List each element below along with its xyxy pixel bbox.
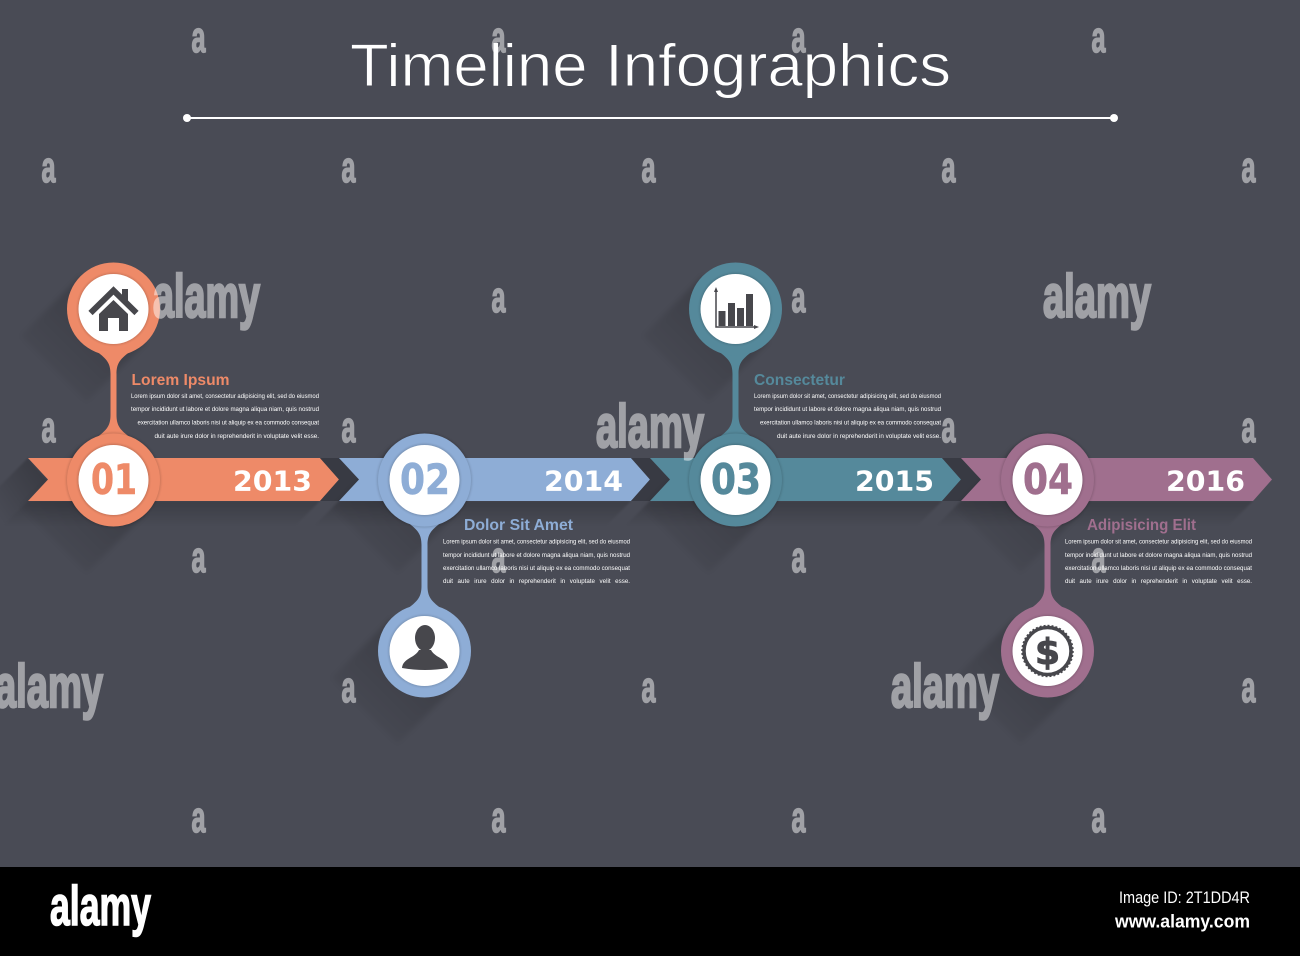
watermarks: a [1092,13,1106,62]
icon circle: person [378,604,471,698]
body text 4: exercitation ullamco laboris nisi ut aliquip ex ea commodo consequat [1065,565,1252,572]
watermarks: a [492,273,506,322]
watermarks: a [192,533,206,582]
watermarks: a [42,403,56,452]
body text 1: duit aute irure dolor in reprehenderit in voluptate velit esse. [154,433,319,440]
body text 3: exercitation ullamco laboris nisi ut aliquip ex ea commodo consequat [760,420,941,426]
body text 2: Lorem ipsum dolor sit amet, consectetur adipisicing elit, sed do eiusmod [443,538,631,546]
watermarks: a [1242,403,1256,452]
watermarks: alamy [1043,263,1151,330]
icon circle: dollar coin: $ [1035,632,1060,673]
body text 4 [1065,538,1253,585]
year 2014: 2014 [544,464,623,498]
number circle 01 [66,432,161,528]
step 4: 2016 [935,432,1272,744]
number circle 01: 01 [91,455,137,504]
ribbon 4 [961,458,1272,501]
icon circle: dollar coin [1001,604,1094,698]
watermarks: a [642,663,656,712]
watermarks: a [342,663,356,712]
body text 2: duit aute irure dolor in reprehenderit in voluptate velit esse. [443,578,630,585]
watermarks: a [1092,793,1106,842]
year 2015: 2015 [855,464,934,498]
title divider line [183,114,1118,122]
watermarks: a [1242,143,1256,192]
number circle 04: 04 [1023,455,1073,504]
heading: Adipisicing Elit: Adipisicing Elit [1087,517,1196,534]
icon circle: house [67,262,160,356]
heading: Consectetur: Consectetur [754,372,845,389]
ribbon 2 [339,458,650,501]
year 2013: 2013 [233,464,312,498]
watermarks: alamy [891,653,999,720]
watermarks: a [792,793,806,842]
body text 3: Lorem ipsum dolor sit amet, consectetur adipisicing elit, sed do eiusmod [754,393,942,400]
watermarks: a [492,533,506,582]
number circle 03 [688,432,783,528]
watermarks: alamy [0,653,103,720]
number circle 02 [377,432,472,528]
body text 3 [754,393,942,440]
body text 4: tempor incididunt ut labore et dolore magna aliqua niam, quis nostrud [1065,552,1253,559]
watermarks: a [642,143,656,192]
ribbon 1 [28,458,339,501]
watermarks: a [792,273,806,322]
watermarks: a [492,793,506,842]
body text 3: duit aute irure dolor in reprehenderit in voluptate velit esse. [777,433,941,440]
watermarks: a [192,793,206,842]
watermarks: a [192,13,206,62]
connector 2 [408,523,440,608]
number circle 04 [1000,432,1095,528]
step 2: 2014 [313,432,650,744]
title: Timeline Infographics [350,32,951,99]
watermarks: a [42,143,56,192]
watermarks: a [942,403,956,452]
body text 2 [443,538,631,585]
connector 1 [98,352,130,437]
watermarks: a [792,13,806,62]
watermarks: a [342,403,356,452]
watermarks: a [1092,533,1106,582]
body text 4: duit aute irure dolor in reprehenderit in voluptate velit esse. [1065,578,1252,585]
body text 1: exercitation ullamco laboris nisi ut aliquip ex ea commodo consequat [138,420,319,426]
connector 4 [1032,523,1064,608]
ribbon 3 [650,458,961,501]
website: www.alamy.com [1114,912,1250,932]
icon circle: bar chart [689,262,782,356]
connector 3 [720,352,752,437]
footer bar [0,867,1300,956]
body text 1: Lorem ipsum dolor sit amet, consectetur adipisicing elit, sed do eiusmod [131,393,320,400]
body text 1 [131,393,320,440]
watermarks: alamy [153,263,260,330]
image id: Image ID: 2T1DD4R [1119,888,1250,907]
watermarks: alamy [596,393,704,460]
number circle 02: 02 [400,455,450,504]
heading: Dolor Sit Amet: Dolor Sit Amet [464,517,573,534]
year 2016: 2016 [1166,464,1245,498]
step 1: 2013 [0,262,339,573]
heading: Lorem Ipsum: Lorem Ipsum [132,372,230,389]
body text 4: Lorem ipsum dolor sit amet, consectetur adipisicing elit, sed do eiusmod [1065,538,1253,546]
watermarks: a [492,13,506,62]
watermarks: a [1242,663,1256,712]
body text 2: exercitation ullamco laboris nisi ut aliquip ex ea commodo consequat [443,565,630,572]
watermarks: a [792,533,806,582]
footer logo: alamy [50,874,151,937]
watermarks: a [942,143,956,192]
body text 3: tempor incididunt ut labore et dolore magna aliqua niam, quis nostrud [754,406,942,413]
body text 2: tempor incididunt ut labore et dolore magna aliqua niam, quis nostrud [443,552,631,559]
step 3: 2015 [624,262,961,573]
number circle 03: 03 [711,455,761,504]
body text 1: tempor incididunt ut labore et dolore magna aliqua niam, quis nostrud [131,406,320,413]
watermarks: a [342,143,356,192]
